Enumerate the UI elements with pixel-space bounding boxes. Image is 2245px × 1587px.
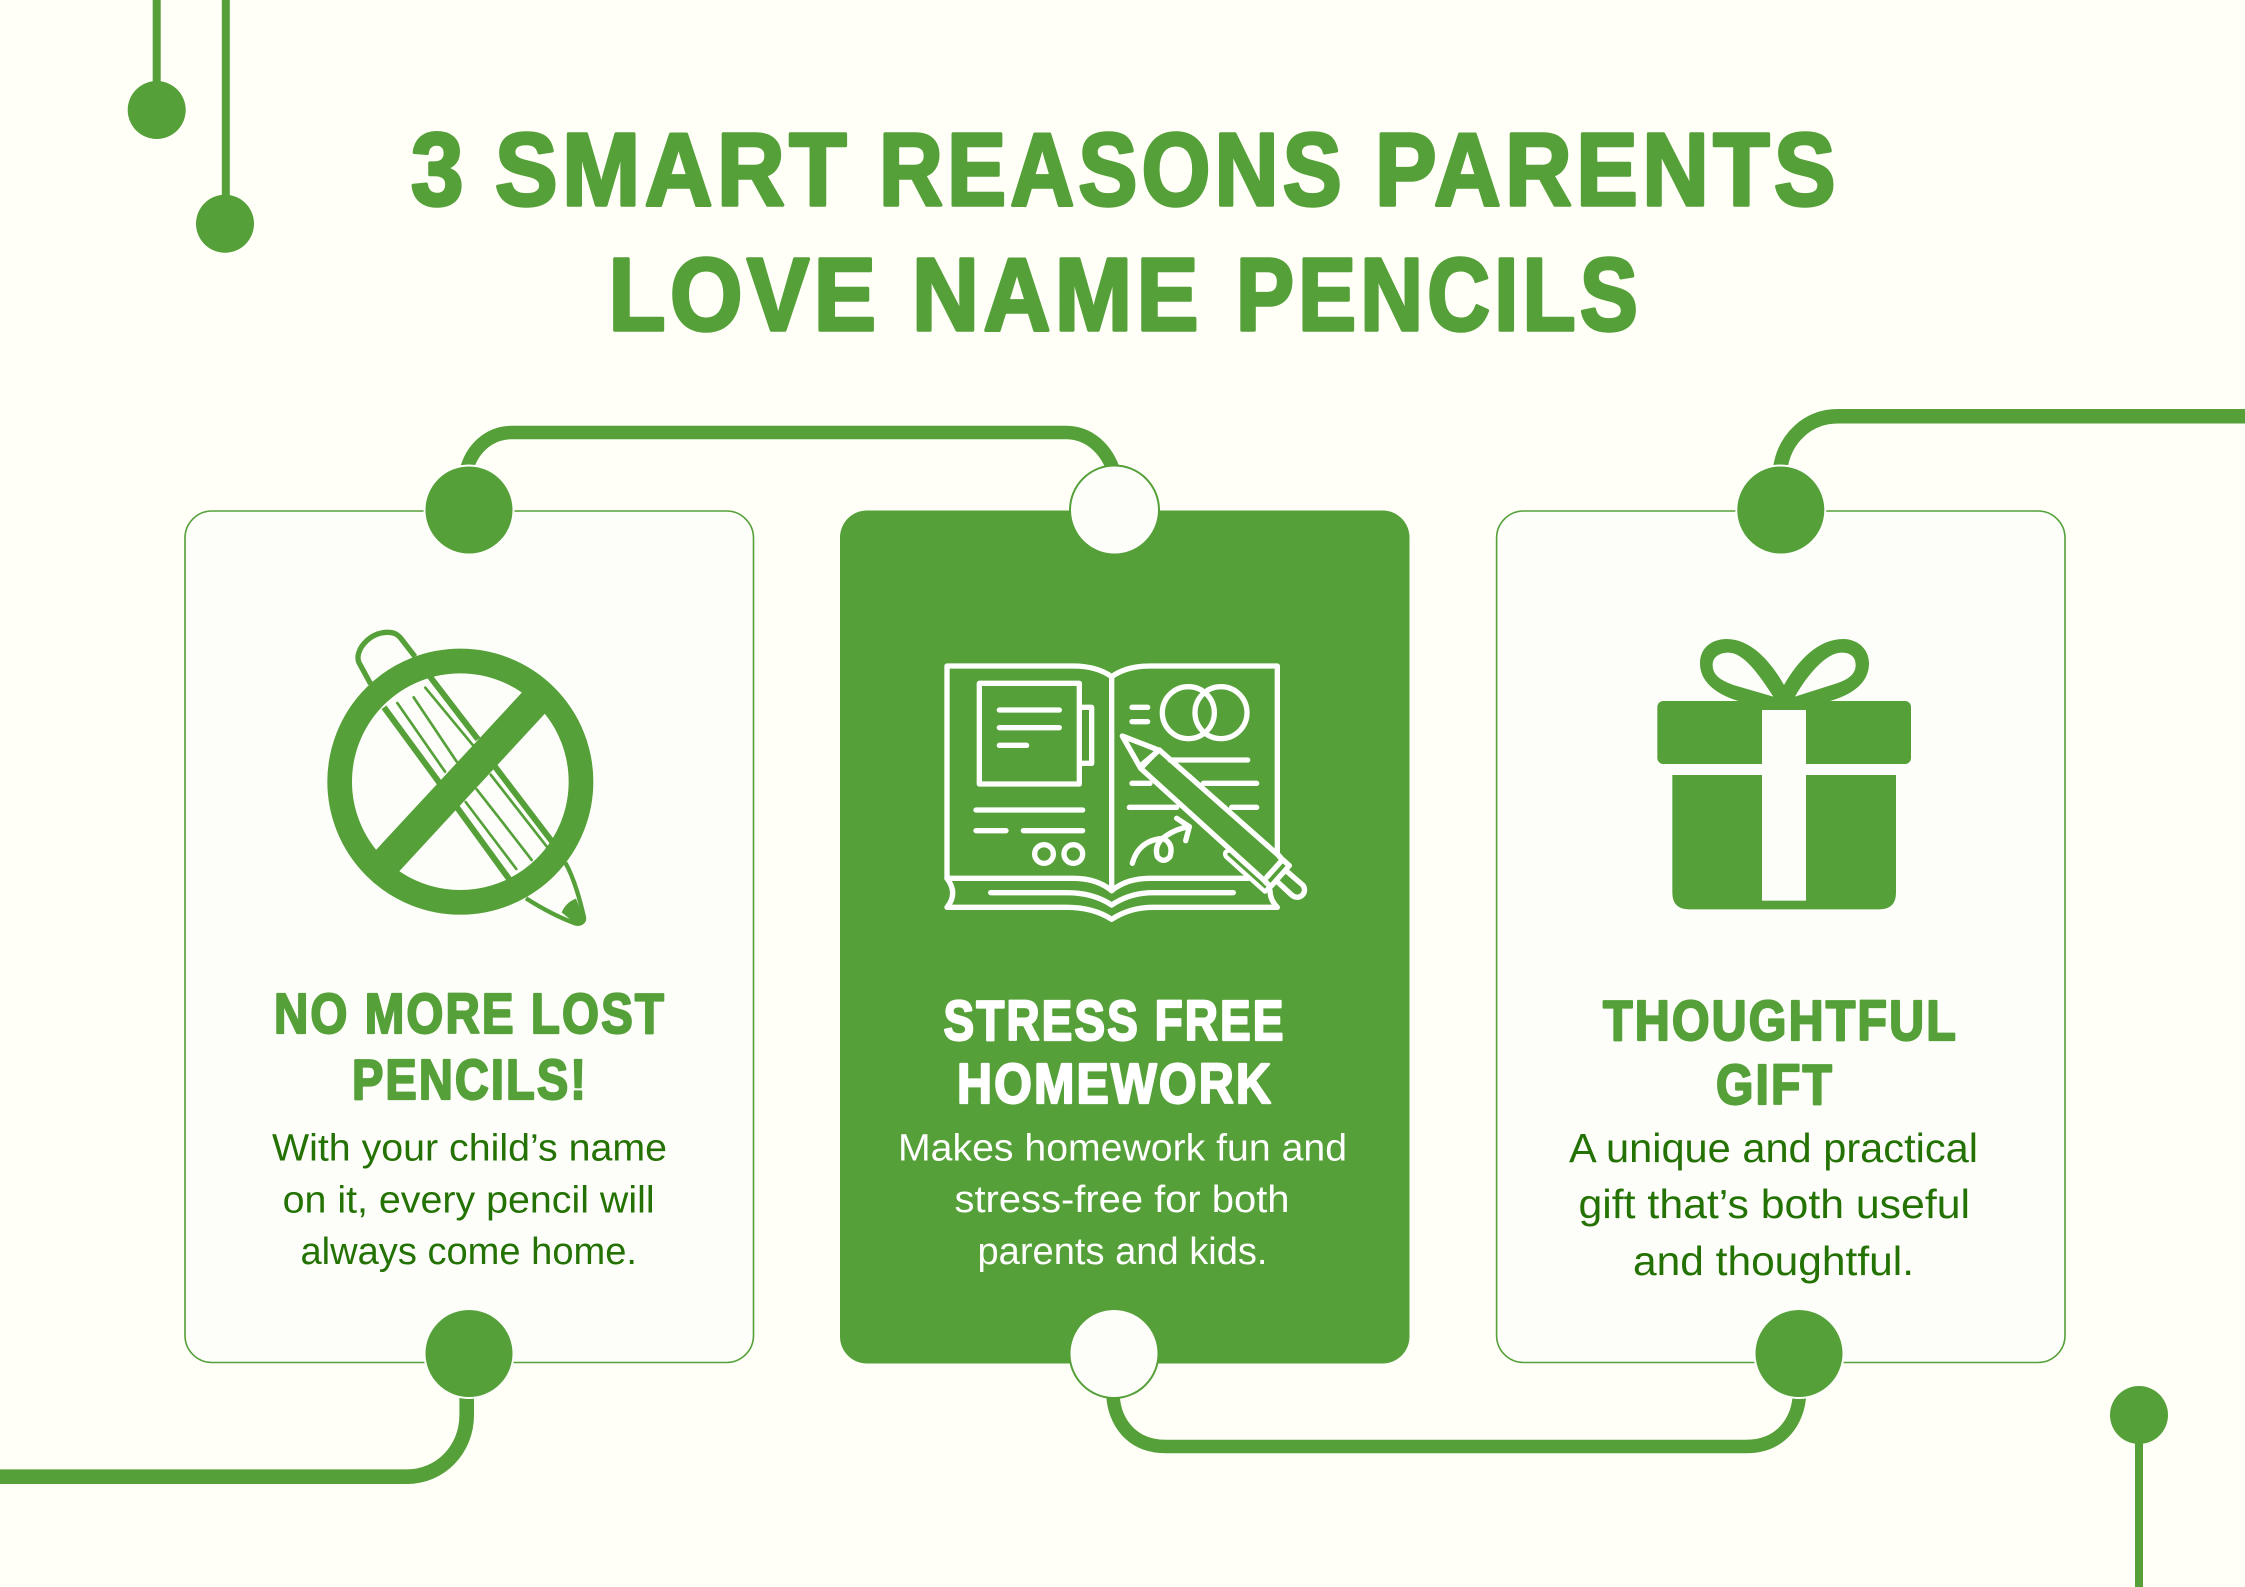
heading: no more lost pencils: PENCILS!	[352, 1048, 588, 1112]
text: card 1 description: on it, every pencil will	[283, 1180, 655, 1222]
node: card 1 top	[424, 466, 514, 554]
heading: stress free homework	[944, 989, 1286, 1116]
decoration: hanging dots top left	[128, 0, 254, 253]
node: card 1 bottom	[424, 1309, 514, 1398]
node: card 3 bottom	[1754, 1309, 1844, 1398]
text: card 2 description	[898, 1128, 1347, 1273]
heading: thoughtful gift	[1603, 989, 1958, 1117]
node: card 2 bottom	[1070, 1309, 1158, 1398]
title: SMART	[495, 112, 851, 227]
text: card 3 description: and thoughtful.	[1633, 1238, 1914, 1284]
node: card 3 top	[1736, 466, 1825, 554]
title	[411, 112, 1840, 352]
title: 3	[411, 112, 468, 227]
text: card 1 description: With your child’s name	[272, 1128, 667, 1170]
panel: no more lost pencils	[185, 511, 754, 1362]
icon: gift box	[1657, 639, 1911, 909]
panel: stress free homework	[840, 510, 1410, 1364]
text: card 2 description: stress-free for both	[954, 1179, 1290, 1221]
title: REASONS	[879, 112, 1346, 227]
icon: open book with pen	[947, 666, 1305, 919]
heading: stress free homework: STRESS FREE	[944, 989, 1286, 1053]
heading: no more lost pencils	[274, 982, 666, 1112]
title: PENCILS	[1236, 237, 1642, 352]
node: card 2 top	[1070, 466, 1159, 554]
title: PARENTS	[1375, 112, 1840, 227]
connector: card 1 to card 2 top	[466, 432, 1114, 472]
text: card 1 description: always come home.	[300, 1231, 637, 1273]
icon: crossed out pencil	[340, 632, 584, 924]
text: card 1 description	[272, 1128, 667, 1273]
decoration: standing dot bottom right	[2110, 1386, 2168, 1587]
connector: card 2 to card 3 bottom	[1113, 1395, 1800, 1446]
heading: no more lost pencils: NO MORE LOST	[274, 982, 666, 1046]
heading: thoughtful gift: GIFT	[1716, 1053, 1834, 1117]
connector: top right line	[1780, 416, 2245, 470]
text: card 3 description: gift that’s both useful	[1578, 1181, 1970, 1227]
title: LOVE	[608, 237, 880, 352]
heading: thoughtful gift: THOUGHTFUL	[1603, 989, 1958, 1053]
text: card 2 description: parents and kids.	[978, 1231, 1268, 1273]
panel: thoughtful gift	[1497, 511, 2065, 1362]
text: card 3 description: A unique and practical	[1569, 1125, 1978, 1171]
heading: stress free homework: HOMEWORK	[957, 1052, 1273, 1116]
title: NAME	[912, 237, 1203, 352]
connector: bottom left line	[0, 1395, 467, 1477]
text: card 3 description	[1569, 1125, 1978, 1284]
text: card 2 description: Makes homework fun and	[898, 1128, 1347, 1170]
